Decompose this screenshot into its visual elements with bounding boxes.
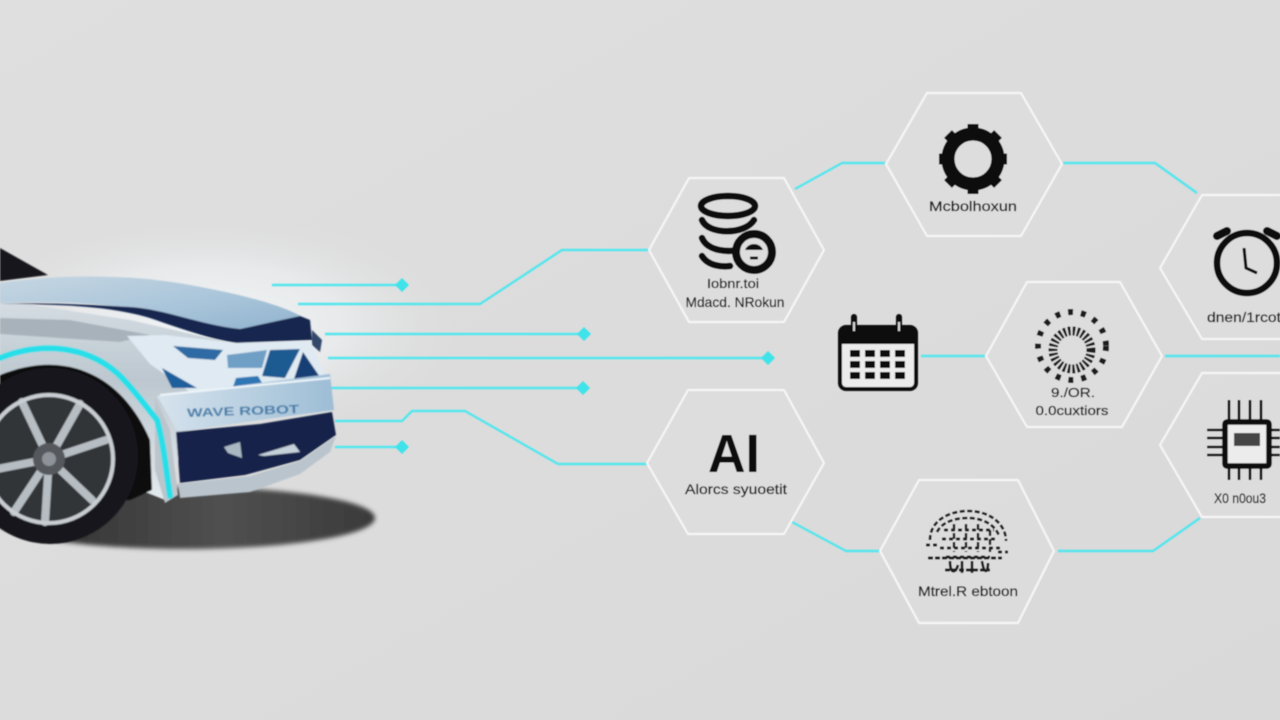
windshield [0,248,48,281]
icon: database with face badge [701,196,772,270]
icon: gear [939,124,1007,194]
connector calendar to sensor [921,355,985,357]
line 7 with diamond [335,440,409,454]
dark hood crease [0,303,312,343]
body side [0,300,240,500]
connector lines from car [272,163,1280,551]
AI heading: AI [708,424,760,484]
label: gear: Mcbolhoxun [929,198,1017,214]
hexagon: gear [886,93,1062,236]
lower grille [176,412,336,483]
label: sensor [1036,385,1109,418]
line 4 with diamond [328,351,775,365]
label: database: Mdacd. NRokun [686,294,784,310]
line 5 with diamond [330,381,590,395]
car front [0,248,336,544]
lower lip [178,436,336,498]
hood [0,276,304,332]
wheel arch [0,365,152,500]
line 1 with diamond [272,278,409,292]
label: chip: X0 n0ou3 [1214,490,1266,506]
hexagon: database [649,178,824,322]
connector AI to brain [792,522,880,551]
headlight [127,335,325,393]
icon: dotted sun [1038,312,1106,380]
icon: calendar [840,317,916,389]
icon: alarm clock [1217,231,1277,293]
label: clock: dnen/1rcot [1207,309,1280,325]
fender edge [155,398,178,503]
hexagon: clock [1160,195,1280,339]
hexagon: AI [647,390,824,534]
line 2 to database hexagon [298,250,649,304]
line 3 with diamond [325,327,591,341]
bumper lettering: WAVE ROBOT [187,402,300,420]
connector sensor to right edge [1165,355,1280,357]
label: brain: Mtrel.R ebtoon [918,583,1018,599]
hexagon: chip [1160,373,1280,517]
label: AI: Alorcs syuoetit [685,481,787,497]
label: sensor: 9./OR. [1051,385,1095,400]
label: database [686,276,784,310]
connector database to gear [795,163,885,189]
label: database: Iobnr.toi [707,276,759,291]
label: sensor: 0.0cuxtiors [1036,403,1109,418]
tire [0,368,138,544]
line 6 to AI hexagon [335,411,647,464]
bumper band [157,374,334,432]
car shadow [0,487,375,549]
icon: microchip [1207,400,1280,480]
hexagon: brain [880,480,1054,623]
connector gear to clock [1063,163,1197,193]
cyan wheel arch accent [0,348,170,496]
icon: circuit brain [926,511,1008,573]
hexagon: sensor [986,282,1162,427]
rim [0,393,115,525]
connector brain to chip [1058,518,1200,551]
